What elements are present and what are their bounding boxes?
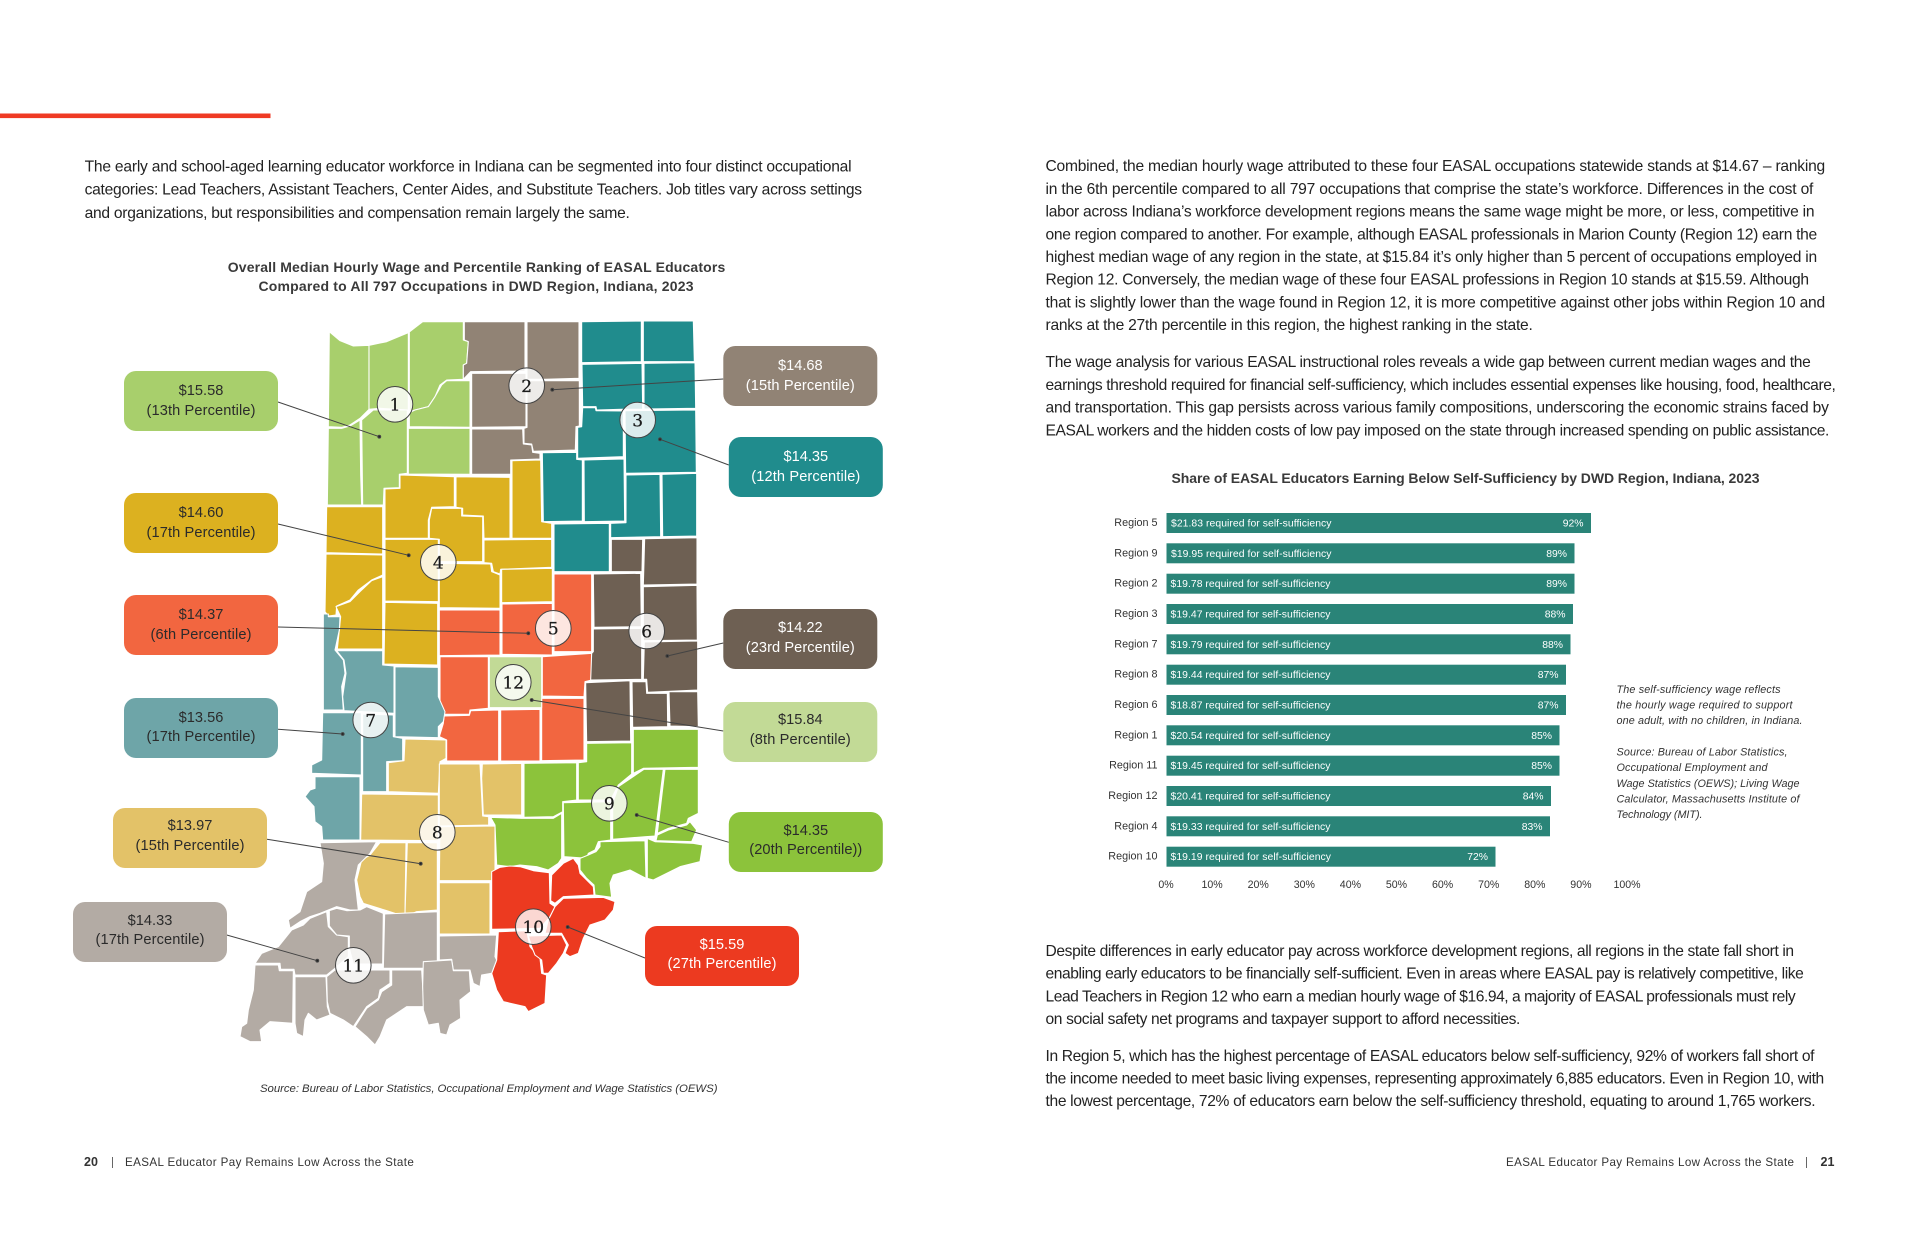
chart note and source: Technology (MIT). — [1616, 809, 1702, 821]
right column paragraphs bottom: the lowest percentage, 72% of educators earn below the self-sufficiency threshold, equating to around 1,765 workers. — [1046, 1093, 1816, 1110]
chart note and source: the hourly wage required to support — [1616, 700, 1794, 712]
intro paragraph: and organizations, but responsibilities and compensation remain largely the same. — [85, 205, 630, 222]
bar Region 3: $19.47 required for self-sufficiency — [1170, 610, 1331, 620]
right column paragraphs top — [1046, 158, 1836, 439]
bar Region 5 — [1114, 513, 1591, 533]
right column paragraphs bottom: Despite differences in early educator pay across workforce development regions, all regions in the state fall short in — [1046, 943, 1794, 960]
marker 8: 8 — [432, 824, 443, 844]
chart x axis labels: 90% — [1570, 879, 1592, 891]
callout region 2: $14.68 — [778, 358, 823, 374]
callout region 6: (23rd Percentile) — [746, 640, 855, 656]
chart x axis labels: 60% — [1432, 879, 1454, 891]
callout region 7 — [124, 698, 278, 758]
marker 3: 3 — [632, 411, 643, 431]
bar Region 2: 89% — [1546, 579, 1567, 590]
Indiana region map — [240, 321, 703, 1045]
bar Region 10: $19.19 required for self-sufficiency — [1170, 852, 1332, 863]
right column paragraphs top: earnings threshold required for financial self-sufficiency, which includes essential expenses like housing, food, healthcare, — [1046, 377, 1836, 394]
chart note and source: Source: Bureau of Labor Statistics, — [1616, 746, 1788, 758]
red accent bar — [0, 114, 270, 118]
bar Region 1: Region 1 — [1114, 729, 1158, 741]
chart note and source — [1616, 684, 1802, 821]
bar Region 7: $19.79 required for self-sufficiency — [1170, 640, 1331, 651]
right column paragraphs top: labor across Indiana’s workforce development regions means the same wage might be more, or less, competitive in — [1046, 204, 1814, 220]
bar Region 8: $19.44 required for self-sufficiency — [1170, 670, 1331, 681]
bar Region 1 — [1114, 725, 1560, 745]
callout region 5: $14.37 — [179, 607, 223, 623]
marker 2 — [509, 368, 544, 404]
bar Region 12: 84% — [1523, 792, 1544, 802]
map source note: Source: Bureau of Labor Statistics, Occupational Employment and Wage Statistics (OEWS) — [260, 1083, 718, 1095]
right column paragraphs top: The wage analysis for various EASAL instructional roles reveals a wide gap between current median wages and the — [1046, 354, 1811, 371]
numbered region markers — [336, 368, 664, 983]
bar Region 1: 85% — [1531, 731, 1552, 742]
callout region 8: $13.97 — [168, 818, 212, 834]
marker 12: 12 — [502, 674, 524, 694]
region 9 — [491, 729, 703, 897]
bar Region 3: 88% — [1545, 610, 1566, 620]
marker 1: 1 — [390, 396, 400, 416]
bar Region 11: $19.45 required for self-sufficiency — [1170, 761, 1331, 772]
right column paragraphs bottom: the income needed to meet basic living expenses, representing approximately 6,885 educators. Even in Region 10, with — [1046, 1071, 1824, 1088]
bar Region 9: 89% — [1546, 549, 1567, 560]
intro paragraph: categories: Lead Teachers, Assistant Teachers, Center Aides, and Substitute Teachers. Job titles vary across settings — [85, 182, 862, 198]
right page footer: EASAL Educator Pay Remains Low Across the State — [1506, 1156, 1794, 1169]
bar Region 12: $20.41 required for self-sufficiency — [1170, 792, 1331, 802]
callout region 6: $14.22 — [778, 620, 823, 636]
intro paragraph: The early and school-aged learning educator workforce in Indiana can be segmented into four distinct occupational — [85, 158, 852, 176]
callout region 9: (20th Percentile)) — [749, 842, 862, 858]
callout region 11: (17th Percentile) — [96, 932, 204, 948]
bar Region 7 — [1114, 634, 1570, 654]
bar Region 7: Region 7 — [1114, 638, 1158, 650]
callout region 4 — [124, 493, 278, 553]
callout region 8 — [113, 808, 267, 868]
marker 10 — [516, 909, 551, 944]
callout region 10: (27th Percentile) — [668, 956, 776, 972]
right column paragraphs bottom: on social safety net programs and taxpayer support to afford necessities. — [1046, 1011, 1520, 1028]
chart x axis labels: 80% — [1524, 879, 1546, 891]
chart note and source: Occupational Employment and — [1616, 762, 1768, 774]
marker 7 — [353, 702, 389, 738]
callout region 4: $14.60 — [179, 505, 223, 521]
bar Region 11: Region 11 — [1109, 760, 1158, 772]
bar Region 12 — [1108, 786, 1551, 806]
marker 2: 2 — [521, 377, 532, 397]
map title — [228, 259, 725, 294]
callout region 3 — [729, 437, 883, 497]
callout region 11 — [73, 902, 227, 962]
chart x axis labels: 40% — [1340, 879, 1362, 891]
right column paragraphs bottom — [1046, 943, 1824, 1110]
callout region 9 — [729, 812, 883, 872]
callout region 3: (12th Percentile) — [751, 469, 860, 485]
bar Region 5: $21.83 required for self-sufficiency — [1171, 518, 1332, 530]
callout region 2 — [723, 346, 877, 406]
chart x axis labels: 10% — [1201, 879, 1223, 891]
bar Region 2: Region 2 — [1114, 578, 1158, 590]
chart note and source: The self-sufficiency wage reflects — [1616, 684, 1781, 696]
bar Region 5: Region 5 — [1114, 517, 1158, 529]
bar Region 8: 87% — [1538, 670, 1558, 681]
bar Region 6: $18.87 required for self-sufficiency — [1170, 700, 1331, 712]
right column paragraphs top: EASAL workers and the hidden costs of low pay imposed on the state through increased spending on public assistance. — [1046, 422, 1829, 439]
marker 4 — [420, 544, 456, 580]
callout region 2: (15th Percentile) — [746, 378, 855, 394]
chart x axis labels: 0% — [1158, 879, 1174, 891]
callout region 10: $15.59 — [700, 937, 744, 953]
chart x axis labels: 100% — [1613, 879, 1641, 891]
chart x axis labels: 30% — [1294, 879, 1315, 891]
bar Region 11 — [1109, 756, 1560, 776]
right column paragraphs top: and transportation. This gap persists across various family compositions, underscoring the economic strains faced by — [1046, 400, 1829, 417]
chart note and source: Wage Statistics (OEWS); Living Wage — [1616, 778, 1800, 790]
marker 7: 7 — [365, 711, 376, 731]
region 1 — [327, 322, 470, 505]
chart note and source: one adult, with no children, in Indiana. — [1616, 715, 1802, 727]
bar Region 4: $19.33 required for self-sufficiency — [1170, 822, 1331, 833]
map title: Compared to All 797 Occupations in DWD Region, Indiana, 2023 — [258, 278, 694, 294]
marker 3 — [620, 402, 656, 438]
bar Region 6: 87% — [1538, 700, 1558, 712]
region 4 — [325, 460, 552, 665]
bar Region 10 — [1108, 847, 1496, 867]
right column paragraphs bottom: In Region 5, which has the highest percentage of EASAL educators below self-sufficiency, 92% of workers fall short of — [1046, 1048, 1815, 1065]
bar Region 1: $20.54 required for self-sufficiency — [1170, 731, 1331, 742]
bar Region 9: $19.95 required for self-sufficiency — [1171, 549, 1332, 560]
marker 10: 10 — [522, 918, 544, 938]
right column paragraphs bottom: Lead Teachers in Region 12 who earn a median hourly wage of $16.94, a majority of EASAL professionals must rely — [1046, 988, 1796, 1005]
bar Region 9 — [1114, 543, 1574, 563]
intro paragraph — [85, 158, 862, 222]
callout region 10 — [645, 926, 799, 986]
bar Region 8 — [1114, 665, 1566, 685]
right column paragraphs top: ranks at the 27th percentile in this region, the highest ranking in the state. — [1046, 317, 1533, 334]
chart note and source: Calculator, Massachusetts Institute of — [1616, 794, 1800, 806]
callout region 11: $14.33 — [128, 913, 172, 929]
callout region 1 — [124, 371, 278, 431]
marker 4: 4 — [433, 554, 444, 574]
wage callouts — [73, 346, 883, 986]
bar Region 3: Region 3 — [1114, 608, 1158, 620]
right column paragraphs top: that is slightly lower than the wage found in Region 12, it is more competitive against other jobs within Region 10 and — [1046, 294, 1825, 311]
callout region 6 — [723, 609, 877, 669]
callout region 5: (6th Percentile) — [150, 627, 252, 643]
region 11 — [240, 842, 497, 1045]
region 8 — [357, 739, 522, 934]
callout region 12: (8th Percentile) — [750, 732, 851, 748]
callout region 5 — [124, 595, 278, 655]
region 2 — [463, 322, 579, 474]
left page footer: 20 — [84, 1155, 98, 1169]
right column paragraphs top: Combined, the median hourly wage attributed to these four EASAL occupations statewide stands at $14.67 – ranking — [1046, 158, 1825, 175]
bar Region 7: 88% — [1542, 640, 1563, 651]
marker 8 — [420, 814, 455, 850]
marker 9: 9 — [604, 795, 615, 815]
region 3 — [542, 321, 697, 572]
callout region 7: $13.56 — [179, 710, 223, 726]
callout region 4: (17th Percentile) — [146, 525, 256, 541]
chart x axis labels: 70% — [1478, 879, 1500, 891]
callout region 12: $15.84 — [778, 712, 823, 728]
bar Region 5: 92% — [1563, 518, 1584, 530]
chart x axis labels: 20% — [1248, 879, 1269, 891]
marker 6 — [629, 613, 664, 649]
bar Region 6 — [1114, 695, 1566, 715]
right column paragraphs top: in the 6th percentile compared to all 797 occupations that comprise the state’s workforce. Differences in the cost of — [1046, 181, 1814, 198]
bar Region 10: 72% — [1467, 852, 1488, 863]
marker 6: 6 — [641, 622, 652, 642]
right page footer: 21 — [1820, 1155, 1834, 1169]
bar Region 4: 83% — [1522, 822, 1542, 833]
bar Region 8: Region 8 — [1114, 669, 1158, 681]
marker 12 — [496, 664, 531, 700]
region 10 — [492, 858, 615, 1012]
chart x axis labels: 50% — [1386, 879, 1408, 891]
region 6 — [586, 538, 698, 742]
bar Region 4 — [1114, 816, 1550, 836]
region 12 — [489, 657, 542, 708]
marker 5 — [536, 610, 571, 646]
callout region 7: (17th Percentile) — [146, 729, 256, 745]
bar Region 3 — [1114, 604, 1573, 624]
right column paragraphs top: highest median wage of any region in the state, at $15.84 it’s only higher than 5 percent of occupations employed in — [1046, 249, 1817, 266]
chart title: Share of EASAL Educators Earning Below Self-Sufficiency by DWD Region, Indiana, 2023 — [1172, 470, 1760, 486]
callout region 12 — [723, 702, 877, 762]
right column paragraphs top: one region compared to another. For example, although EASAL professionals in Marion County (Region 12) earn the — [1046, 226, 1817, 243]
bar Region 11: 85% — [1531, 761, 1552, 772]
callout region 9: $14.35 — [783, 823, 828, 839]
bar Region 2: $19.78 required for self-sufficiency — [1170, 579, 1331, 590]
right column paragraphs top: Region 12. Conversely, the median wage of these four EASAL professions in Region 10 stands at $15.59. Although — [1046, 272, 1809, 288]
region 7 — [305, 614, 445, 840]
marker 11: 11 — [342, 957, 364, 977]
right column paragraphs bottom: enabling early educators to be financially self-sufficient. Even in areas where EASAL pay is relatively competitive, like — [1046, 966, 1804, 983]
region 5 — [439, 574, 592, 761]
leader lines with end dots — [227, 379, 729, 962]
callout region 8: (15th Percentile) — [136, 838, 244, 854]
bar Region 12: Region 12 — [1108, 790, 1158, 802]
callout region 1: (13th Percentile) — [146, 403, 256, 419]
bar chart — [1108, 513, 1591, 867]
left page footer: EASAL Educator Pay Remains Low Across the State — [125, 1156, 414, 1169]
bar Region 2 — [1114, 574, 1574, 594]
chart x axis labels — [1158, 879, 1641, 891]
marker 11 — [336, 948, 371, 983]
bar Region 4: Region 4 — [1114, 820, 1158, 832]
callout region 3: $14.35 — [783, 449, 828, 465]
callout region 1: $15.58 — [179, 383, 223, 399]
bar Region 6: Region 6 — [1114, 699, 1158, 711]
marker 1 — [377, 386, 413, 422]
marker 5: 5 — [548, 620, 559, 640]
bar Region 10: Region 10 — [1108, 851, 1158, 863]
marker 9 — [592, 786, 627, 821]
map title: Overall Median Hourly Wage and Percentile Ranking of EASAL Educators — [228, 259, 725, 275]
bar Region 9: Region 9 — [1114, 547, 1158, 559]
